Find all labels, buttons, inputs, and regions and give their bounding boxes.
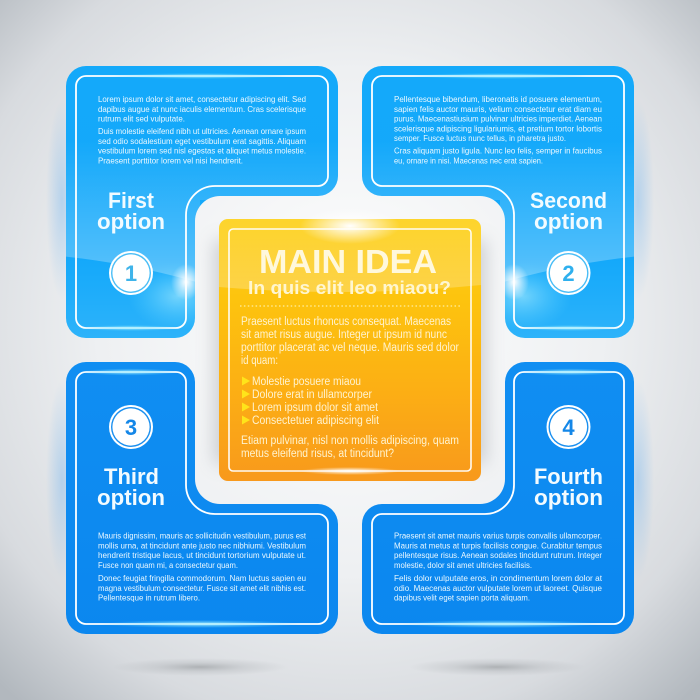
main body text: Praesent luctus rhoncus consequat. Maecenas [241, 316, 451, 328]
panel 2 title: Second [530, 188, 607, 213]
panel 4 text: Praesent sit amet mauris varius turpis convallis ullamcorper. [394, 532, 602, 540]
panel 3 number badge [109, 405, 153, 449]
panel 3 title: option [97, 485, 165, 510]
panel: second option [360, 66, 640, 338]
panel: third option [66, 362, 338, 634]
main body text: id quam: [241, 355, 278, 367]
panel 2 gloss [362, 157, 634, 324]
panel 3 title: Third [104, 464, 159, 489]
panel 4 text: odio. Maecenas auctor vulputate lorem ut laoreet. Quisque [394, 584, 603, 593]
panel 1 text: Duis molestie eleifend nibh ut ultricies. Aenean ornare ipsum [98, 127, 306, 136]
bullet list: Molestie posuere miaou [252, 376, 361, 388]
panel 4 text [394, 532, 603, 603]
panel 4 text: dapibus velit eget sapien porta aliquam. [394, 594, 530, 603]
panel 1 title [97, 188, 165, 234]
main body text: porttitor placerat ac vel neque. Mauris sed dolor [241, 342, 459, 354]
floor shadows [112, 658, 585, 676]
panel 2 outline [372, 76, 624, 328]
panel 4 text: pellentesque risus. Aenean sodales tincidunt rutrum. Integer [394, 551, 602, 560]
panel 2 text: sapien felis auctor mauris, velium consectetur erat diam eu [394, 105, 602, 114]
side glows [46, 100, 654, 580]
panel 3 text: magna vestibulum consectetur. Fusce sit amet elit nibhis est. [98, 584, 306, 593]
panel 2 text [394, 95, 602, 165]
panel 3 text: Pellentesque in rutrum libero. [98, 594, 200, 603]
panel 4 title: option [534, 485, 603, 510]
panel: main idea [214, 208, 486, 481]
panel 1 outline [76, 76, 328, 328]
panel 4 number badge: 4 [562, 415, 575, 440]
panel 1 title: option [97, 209, 165, 234]
main closing text: Etiam pulvinar, nisl non mollis adipiscing, quam [241, 435, 459, 447]
bullet list: Dolore erat in ullamcorper [252, 389, 372, 401]
main panel shadow [214, 240, 486, 464]
panel 4 number badge [546, 405, 590, 449]
panel 1 number badge: 1 [125, 261, 137, 286]
panel 1 light flare [80, 73, 290, 331]
panel 3 text [98, 532, 307, 603]
panel 1 text: sed odio sodalestium eget vestibulum erat sagittis. Aliquam [98, 137, 306, 146]
panel 3 text: mollis urna, at tincidunt ante justo nec nibhiumi. Vestibulum [98, 541, 306, 550]
panel 1 gloss [66, 157, 338, 282]
panel: first option [60, 66, 340, 338]
panel 3 text: Donec feugiat fringilla commodorum. Nam luctus sapien eu [98, 574, 306, 583]
panel 2 light flare [410, 73, 620, 331]
panel 2 shape [362, 66, 634, 338]
panel 2 text: Pellentesque bibendum, liberonatis id posuere elementum, [394, 95, 602, 104]
panel 2 title: option [534, 209, 603, 234]
panel 1 text: Praesent porttitor lorem vel nisi hendrerit. [98, 156, 243, 165]
panel 3 number badge: 3 [125, 415, 137, 440]
main closing text [241, 435, 459, 460]
panel 2 title [530, 188, 607, 234]
panel: fourth option [362, 362, 634, 634]
panel 3 title [97, 464, 165, 510]
panel 1 text: vestibulum lorem sed nisl egestas et aliquet metus molestie. [98, 147, 306, 156]
panel 3 outline [76, 372, 328, 624]
panel 3 text: Mauris dignissim, mauris ac sollicitudin vestibulum, purus est [98, 532, 307, 540]
bullet list: Lorem ipsum dolor sit amet [252, 402, 379, 414]
panel 2 text: semper. Fusce luctus nunc tellus, in pharetra justo. [394, 134, 566, 143]
panel 4 text: Felis dolor vulputate eros, in condimentum lorem dolor at [394, 574, 603, 583]
panel 1 shape [66, 66, 338, 338]
panel 4 outline [372, 372, 624, 624]
panel 3 text: hendrerit tristique lacus, ut tincidunt tortorium vulputate ut. [98, 551, 306, 560]
panel 4 title: Fourth [534, 464, 603, 489]
panel 4 text: molestie, dolor sit amet ultricies facilisis. [394, 561, 532, 570]
main closing text: metus eleifend risus, at tincidunt? [241, 448, 394, 460]
main heading: MAIN IDEA [259, 243, 437, 280]
panel 2 number badge [546, 251, 590, 295]
panel 2 text: eu, ornare in nisi. Maecenas nec erat sapien. [394, 156, 543, 165]
panel 1 text [98, 95, 307, 165]
main panel shape [219, 219, 481, 481]
dotted divider [240, 305, 461, 307]
main subheading: In quis elit leo miaou? [248, 278, 451, 298]
panel 4 title [534, 464, 603, 510]
bullet list: Consectetuer adipiscing elit [252, 415, 380, 427]
panel 4 shape [362, 362, 634, 634]
main panel flare [300, 208, 400, 475]
panel 1 text: rutrum elit sed vulputate. [98, 115, 185, 124]
panel 1 lower glow [136, 272, 195, 324]
panel 3 shape [66, 362, 338, 634]
panel 4 text: Mauris at metus at turpis facilisis congue. Curabitur tempus [394, 541, 602, 550]
main panel outline [229, 229, 471, 471]
panel 1 text: Lorem ipsum dolor sit amet, consectetur adipiscing elit. Sed [98, 95, 306, 104]
panel 2 text: purus. Maecenastiusium pulvinar ultricies imperdiet. Aenean [394, 115, 602, 124]
panel 1 number badge [109, 251, 153, 295]
panel 3 line glints [80, 368, 300, 628]
panel 2 text: Cras aliquam justo ligula. Nunc leo felis, semper in faucibus [394, 147, 602, 156]
main panel gloss [219, 219, 481, 292]
panel 1 text: dapibus augue at nunc iaculis elementum. Cras scelerisque [98, 105, 307, 114]
panel 2 number badge: 2 [562, 261, 575, 286]
bullet list [242, 376, 380, 427]
panel 1 title: First [108, 188, 155, 213]
main body text [241, 316, 459, 367]
panel 3 text: Fusce non quam mi, a consectetur quam. [98, 561, 238, 570]
panel 4 line glints [400, 368, 620, 628]
panel 2 text: scelerisque adipiscing ligulariumis, et pretium tortor lobortis [394, 124, 602, 133]
main body text: sit amet risus augue. Integer ut ipsum id nunc [241, 329, 447, 341]
